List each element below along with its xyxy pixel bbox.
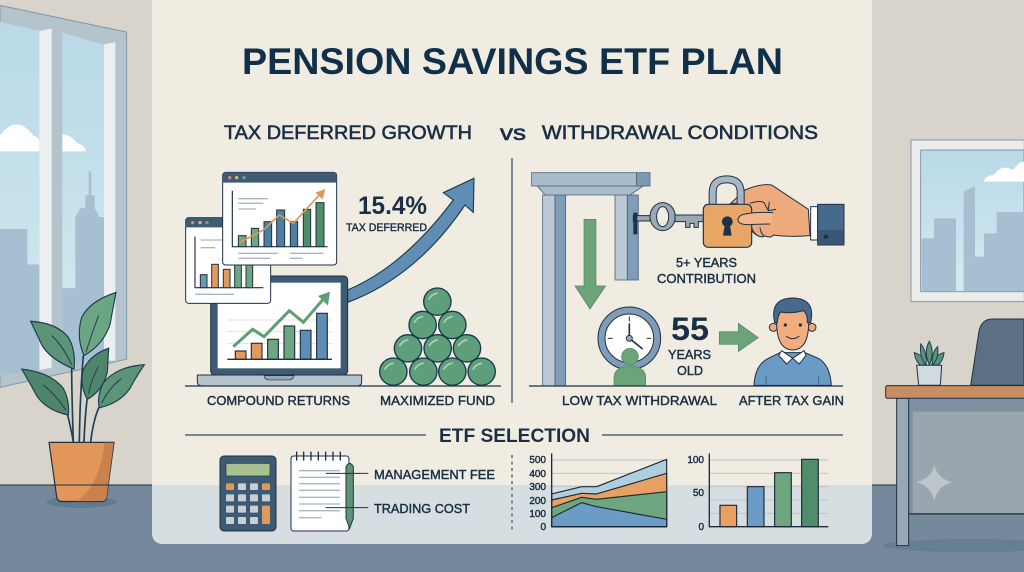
icon: green person silhouette	[614, 348, 646, 386]
baseline	[529, 385, 843, 387]
icon: green right arrow	[719, 323, 758, 352]
icon: smiling man	[754, 298, 831, 385]
heading: vs: vs	[500, 122, 526, 145]
stacked area chart: 100	[529, 509, 546, 520]
bar chart: 50	[693, 488, 704, 499]
icon: notepad with pencil	[291, 452, 368, 531]
icon: gate frame	[532, 173, 650, 386]
label: maximized fund: MAXIMIZED FUND	[380, 393, 495, 408]
stacked area chart: 0	[540, 522, 546, 533]
icon: back chart window	[186, 218, 271, 303]
center divider	[511, 158, 513, 403]
stat: 55: 55	[671, 311, 709, 347]
floor line	[0, 484, 897, 486]
icon: laptop with chart	[197, 276, 362, 386]
stacked area chart: 500	[529, 455, 546, 466]
icon: green down arrow	[575, 219, 606, 309]
icon: clock	[598, 307, 661, 370]
stacked area chart: 400	[529, 469, 546, 480]
panel: ETF selection	[185, 426, 843, 533]
label: 5+ years: 5+ YEARS	[676, 256, 737, 270]
stat: 15.4%: 15.4%	[358, 192, 427, 220]
background: floor	[0, 485, 1024, 572]
right window	[911, 140, 1024, 302]
label: years: YEARS	[668, 347, 711, 362]
label: compound returns: COMPOUND RETURNS	[207, 393, 350, 408]
heading: tax deferred growth: TAX DEFERRED GROWTH	[224, 122, 472, 144]
label: tax deferred: TAX DEFERRED	[346, 222, 427, 234]
panel: tax deferred growth illustration	[185, 172, 501, 408]
title: PENSION SAVINGS ETF PLAN	[242, 41, 783, 82]
label: after tax gain: AFTER TAX GAIN	[739, 393, 844, 408]
icon: front chart window	[223, 172, 337, 265]
label: contribution: CONTRIBUTION	[657, 272, 756, 286]
panel: withdrawal conditions illustration	[529, 173, 844, 408]
stacked area chart: 300	[529, 482, 546, 493]
left window	[0, 5, 127, 387]
icon: calculator	[220, 456, 276, 531]
label: old: OLD	[677, 363, 703, 378]
icon: padlock and hand	[703, 179, 844, 247]
label: low tax withdrawal: LOW TAX WITHDRAWAL	[562, 393, 717, 408]
bar chart	[687, 453, 828, 533]
bar chart: 100	[687, 455, 704, 466]
bar chart: 0	[698, 522, 704, 533]
heading: withdrawal conditions: WITHDRAWAL CONDITIONS	[542, 122, 818, 144]
label: trading cost: TRADING COST	[374, 501, 470, 516]
icon: key	[633, 203, 704, 234]
stacked area chart	[529, 453, 667, 533]
section rule	[185, 434, 843, 436]
baseline	[185, 385, 501, 387]
plant in orange pot	[22, 292, 144, 508]
main panel	[152, 0, 872, 544]
desk with plant and chair	[883, 319, 1024, 552]
icon: growth arrow	[348, 178, 474, 302]
label: management fee: MANAGEMENT FEE	[374, 467, 495, 482]
stacked area chart: 200	[529, 496, 546, 507]
icon: stacked green balls	[380, 288, 495, 385]
heading: ETF selection: ETF SELECTION	[439, 426, 590, 447]
dotted divider	[511, 455, 513, 532]
